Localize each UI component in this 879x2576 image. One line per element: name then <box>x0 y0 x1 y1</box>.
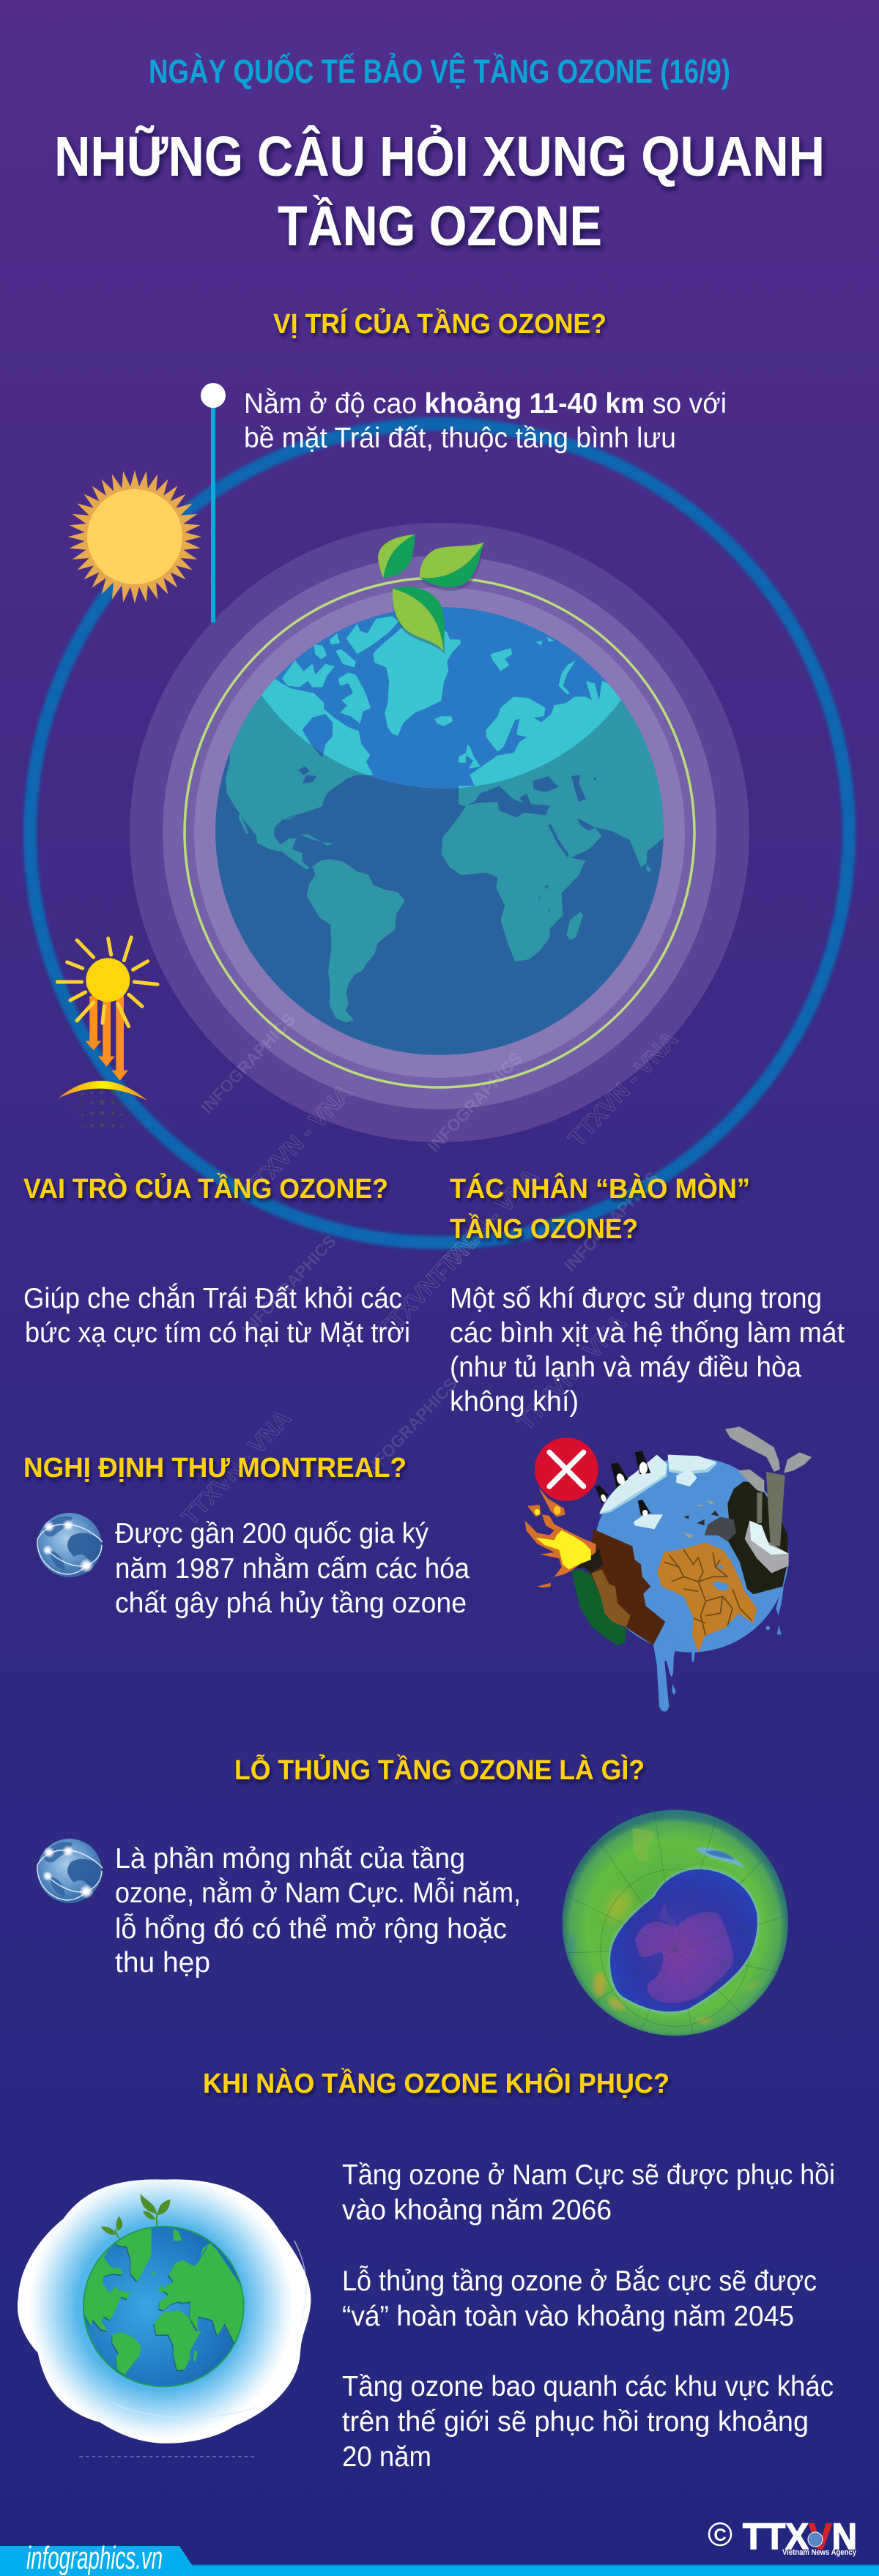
text: agents description: (như tủ lạnh và máy điều hòa <box>450 1352 801 1383</box>
watermarks: INFOGRAPHICS <box>424 1049 526 1155</box>
watermarks: INFOGRAPHICS <box>197 1010 299 1117</box>
icon: large sun <box>41 461 207 632</box>
watermarks: INFOGRAPHICS <box>359 1374 461 1481</box>
heading: what is the ozone hole: LỖ THỦNG TẦNG OZONE LÀ GÌ? <box>234 1753 645 1786</box>
logo: TTXVN: Vietnam News Agency <box>782 2548 857 2557</box>
text: recovery timeline: Tầng ozone ở Nam Cực sẽ được phục hồi <box>342 2159 835 2191</box>
heading: role of ozone layer: VAI TRÒ CỦA TẦNG OZONE? <box>23 1172 388 1205</box>
text: Montreal description: năm 1987 nhằm cấm các hóa <box>115 1553 470 1585</box>
watermarks: TTXVN - VNA <box>237 1079 357 1205</box>
illustration: satellite view of ozone hole <box>562 1809 789 2036</box>
heading: when will ozone recover: KHI NÀO TẦNG OZONE KHÔI PHỤC? <box>203 2066 670 2099</box>
text: ozone hole description <box>115 1843 521 1978</box>
heading: Montreal protocol: NGHỊ ĐỊNH THƯ MONTREAL? <box>23 1453 407 1484</box>
text: agents description: Một số khí được sử dụng trong <box>450 1283 822 1314</box>
brown land <box>586 1529 665 1645</box>
watermarks: TTXVN - VNA <box>424 1163 544 1289</box>
text: altitude of the ozone layer: Nằm ở độ cao khoảng 11-40 km so với <box>244 388 727 420</box>
watermarks: TTXVN - VNA <box>563 1026 683 1152</box>
small plants on top <box>101 2194 171 2238</box>
logo: TTXVN: C <box>713 2525 727 2545</box>
watermarks: INFOGRAPHICS <box>560 1168 662 1275</box>
icon: globe bullet 1 <box>37 1513 103 1577</box>
text: ozone hole description: ozone, nằm ở Nam Cực. Mỗi năm, <box>115 1877 521 1909</box>
text: Montreal description: chất gây phá hủy tầng ozone <box>115 1587 467 1619</box>
text: recovery timeline: “vá” hoàn toàn vào khoảng năm 2045 <box>342 2301 794 2332</box>
heading: agents eroding ozone: TẦNG OZONE? <box>450 1213 638 1245</box>
text: role description: bức xạ cực tím có hại từ Mặt trời <box>25 1317 410 1349</box>
text: recovery timeline: 20 năm <box>342 2441 431 2473</box>
text: recovery timeline: vào khoảng năm 2066 <box>342 2195 612 2226</box>
footer band <box>0 2540 879 2576</box>
cancel badge <box>535 1437 598 1501</box>
heading: position of ozone layer: VỊ TRÍ CỦA TẦNG OZONE? <box>273 308 607 340</box>
text: role description: Giúp che chắn Trái Đất khỏi các <box>23 1283 402 1314</box>
top line: occasion: NGÀY QUỐC TẾ BẢO VỆ TẦNG OZONE (16/9) <box>149 53 730 90</box>
main title: TẦNG OZONE <box>278 194 602 258</box>
cracked land <box>657 1543 757 1653</box>
text: Montreal description: Được gần 200 quốc gia ký <box>115 1518 429 1549</box>
heading: agents eroding ozone: TÁC NHÂN “BÀO MÒN” <box>450 1172 750 1205</box>
text: agents description <box>450 1283 845 1418</box>
footer band: infographics.vn <box>26 2540 163 2576</box>
heading: agents eroding ozone <box>450 1172 750 1245</box>
text: agents description: không khí) <box>450 1386 579 1418</box>
globe body with drips <box>593 1457 789 1711</box>
icon: small sun with UV arrows <box>57 937 157 1128</box>
text: ozone hole description: lỗ hổng đó có thể mở rộng hoặc <box>115 1913 507 1945</box>
text: recovery timeline: trên thế giới sẽ phục hồi trong khoảng <box>342 2406 809 2438</box>
text: recovery timeline: Tầng ozone bao quanh các khu vực khác <box>342 2371 834 2402</box>
illustration: damaged earth <box>525 1426 812 1711</box>
altitude marker pin <box>201 383 226 622</box>
text: agents description: các bình xịt và hệ thống làm mát <box>450 1317 845 1349</box>
text: altitude of the ozone layer <box>244 388 727 454</box>
icon: globe bullet 2 <box>37 1839 103 1903</box>
watermarks <box>177 1010 683 1530</box>
icon: three leaves on globe <box>378 535 485 655</box>
text: recovery timeline: Lỗ thủng tầng ozone ở Bắc cực sẽ được <box>342 2266 817 2297</box>
text: altitude of the ozone layer: bề mặt Trái đất, thuộc tầng bình lưu <box>244 422 676 454</box>
text: ozone hole description: Là phần mỏng nhất của tầng <box>115 1843 465 1875</box>
fire <box>525 1488 596 1587</box>
text: Montreal description <box>115 1518 470 1619</box>
main globe with world map <box>215 607 664 1055</box>
watermarks: INFOGRAPHICS <box>238 1232 340 1339</box>
concentric atmosphere bands <box>130 523 749 1142</box>
watermarks: TTXVN - VNA <box>512 1309 631 1435</box>
text: role description <box>23 1283 410 1349</box>
watermarks: TTXVN - VNA <box>373 1218 492 1344</box>
illustration: healthy earth in ozone cloud <box>18 2179 311 2457</box>
text: ozone hole description: thu hẹp <box>115 1947 210 1978</box>
ice and penguins <box>596 1451 717 1529</box>
big ozone orbit ring <box>30 424 849 1243</box>
factory on black land <box>683 1426 812 1594</box>
watermarks: TTXVN - VNA <box>177 1404 296 1530</box>
logo: TTXVN: TTXVN <box>743 2516 857 2557</box>
text: recovery timeline <box>342 2159 835 2473</box>
main title <box>54 124 825 258</box>
